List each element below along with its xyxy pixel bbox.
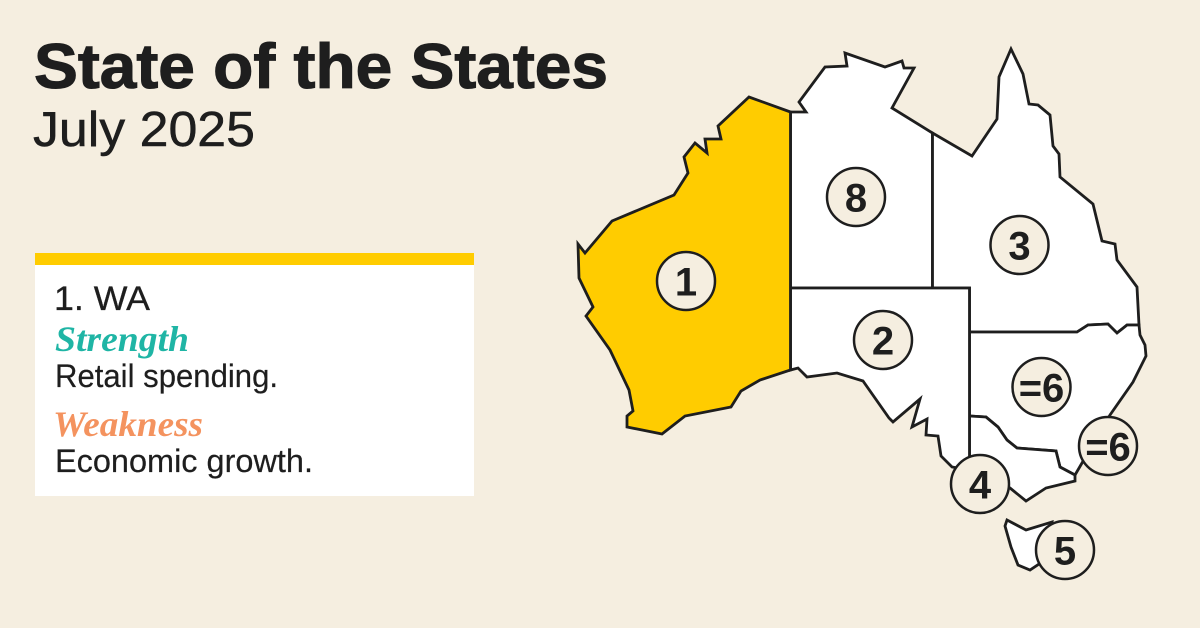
rank badge: TAS 5 xyxy=(1036,521,1094,579)
card heading: 1. WA xyxy=(54,280,150,318)
rank badge: WA 1: 1 xyxy=(675,260,697,304)
panel: selected state card xyxy=(35,253,474,496)
rank badge: ACT =6: =6 xyxy=(1085,426,1131,470)
rank badge: VIC 4: 4 xyxy=(969,464,992,508)
map of Australia xyxy=(578,49,1146,579)
rank badge: QLD 3 xyxy=(990,216,1048,274)
state: Western Australia xyxy=(578,97,790,434)
rank badge: SA 2 xyxy=(854,311,912,369)
subtitle: date: July 2025 xyxy=(33,103,255,157)
strength text: Retail spending. xyxy=(55,358,278,394)
rank badge: VIC 4 xyxy=(951,455,1009,513)
state: Tasmania xyxy=(1005,520,1052,570)
rank badge: TAS 5: 5 xyxy=(1054,530,1076,574)
title: State of the States xyxy=(34,32,608,102)
state: Victoria xyxy=(970,416,1075,501)
rank badge: QLD 3: 3 xyxy=(1008,224,1031,268)
rank badge: NT 8 xyxy=(827,168,885,226)
weakness text: Economic growth. xyxy=(55,443,313,479)
state: Northern Territory xyxy=(790,53,932,288)
rank badge: NSW =6 xyxy=(1012,358,1070,416)
state: Queensland xyxy=(932,49,1139,333)
rank badge: ACT =6 xyxy=(1079,417,1137,475)
rank badge: SA 2: 2 xyxy=(872,320,894,364)
rank badge: NSW =6: =6 xyxy=(1019,366,1064,410)
weakness label: Weakness xyxy=(53,404,203,444)
state: New South Wales xyxy=(970,324,1146,475)
rank badge: WA 1 xyxy=(657,252,715,310)
strength label: Strength xyxy=(55,319,189,359)
state: South Australia xyxy=(790,288,970,470)
rank badge: NT 8: 8 xyxy=(845,176,867,220)
